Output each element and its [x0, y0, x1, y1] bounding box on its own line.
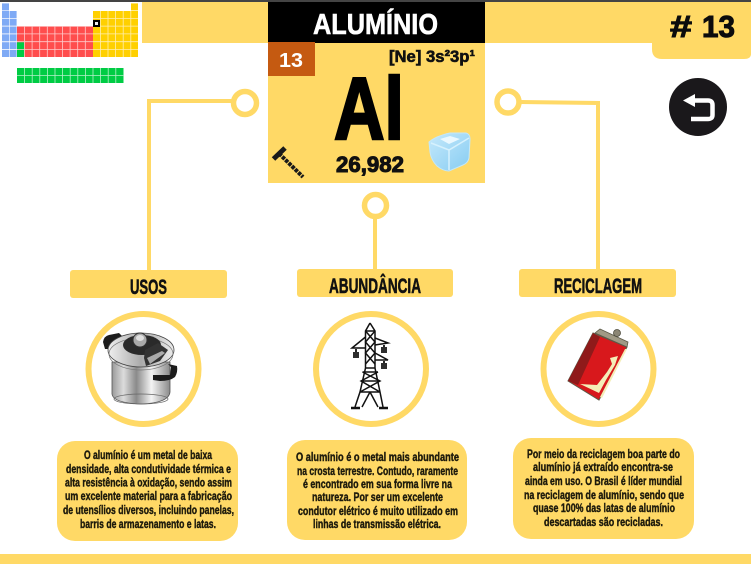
bottom band: [0, 554, 751, 564]
atomic mass: 26,982: [336, 152, 404, 177]
text panel: usos: alta resistência à oxidação, sendo assim: [65, 478, 232, 490]
ring: abundancia: [316, 314, 426, 424]
heading: abundancia: ABUNDÂNCIA: [329, 274, 421, 298]
icon: ice cube: [429, 133, 470, 171]
heading: reciclagem: RECICLAGEM: [554, 275, 642, 298]
text panel: usos: [57, 441, 238, 541]
back button: [669, 78, 727, 136]
connector: abundancia: [364, 194, 386, 271]
atomic number: 13: [279, 50, 303, 72]
text panel: abundancia: é encontrado em sua forma livre na: [303, 479, 452, 491]
top header band: [0, 0, 751, 43]
lanthanide and actinide rows: [17, 68, 124, 83]
alkali metals column cells: [2, 3, 17, 57]
element number tag: #: [670, 9, 692, 44]
heading: abundancia: [297, 269, 453, 298]
text panel: reciclagem: descartadas são recicladas.: [544, 517, 663, 529]
text panel: usos: um excelente material para a fabricação: [65, 491, 232, 503]
icon: screw: [274, 148, 303, 177]
text panel: abundancia: linhas de transmissão elétrica.: [313, 519, 441, 531]
text panel: reciclagem: na reciclagem de alumínio, sendo que: [524, 490, 684, 502]
ring: reciclagem: [544, 314, 654, 424]
text panel: abundancia: [287, 440, 467, 540]
heading: usos: USOS: [130, 276, 167, 299]
text panel: usos: barris de armazenamento e latas.: [80, 519, 216, 531]
text panel: reciclagem: quase 100% das latas de alumínio: [533, 503, 675, 515]
text panel: usos: de utensílios diversos, incluindo panelas,: [63, 505, 234, 517]
text panel: abundancia: natureza. Por ser um excelente: [312, 492, 443, 504]
element number tag: [652, 9, 751, 59]
text panel: reciclagem: Por meio da reciclagem boa parte do: [527, 449, 680, 461]
connector: usos: [149, 92, 256, 272]
text panel: usos: O alumínio é um metal de baixa: [84, 450, 212, 462]
text panel: reciclagem: ainda em uso. O Brasil é líder mundial: [525, 476, 682, 488]
element card: [268, 2, 485, 183]
text panel: reciclagem: [513, 438, 694, 539]
icon: crushed soda can: [568, 329, 628, 400]
text panel: abundancia: O alumínio é o metal mais abundante: [296, 452, 459, 464]
transition metals block: [17, 26, 93, 57]
p-block cells: [93, 3, 138, 57]
element number tag: 13: [702, 9, 735, 44]
element name bar: [268, 2, 485, 43]
periodic table locator: [0, 2, 142, 88]
selected element marker: [93, 20, 100, 27]
element name bar: ALUMÍNIO: [313, 7, 438, 41]
atomic number: [268, 42, 315, 76]
icon: pressure cooker: [103, 333, 177, 404]
icon: transmission tower: [351, 323, 388, 408]
heading: reciclagem: [519, 269, 676, 298]
text panel: usos: densidade, alta condutividade térmica e: [66, 464, 231, 476]
heading: usos: [70, 270, 227, 299]
text panel: reciclagem: alumínio já extraído encontra-se: [533, 462, 673, 474]
ring: usos: [88, 314, 198, 424]
element symbol: Al: [334, 59, 404, 158]
text panel: abundancia: na crosta terrestre. Contudo, raramente: [297, 466, 458, 478]
electron configuration: [Ne] 3s²3p¹: [389, 47, 475, 66]
text panel: abundancia: condutor elétrico é muito utilizado em: [298, 506, 458, 518]
connector: reciclagem: [497, 91, 598, 271]
